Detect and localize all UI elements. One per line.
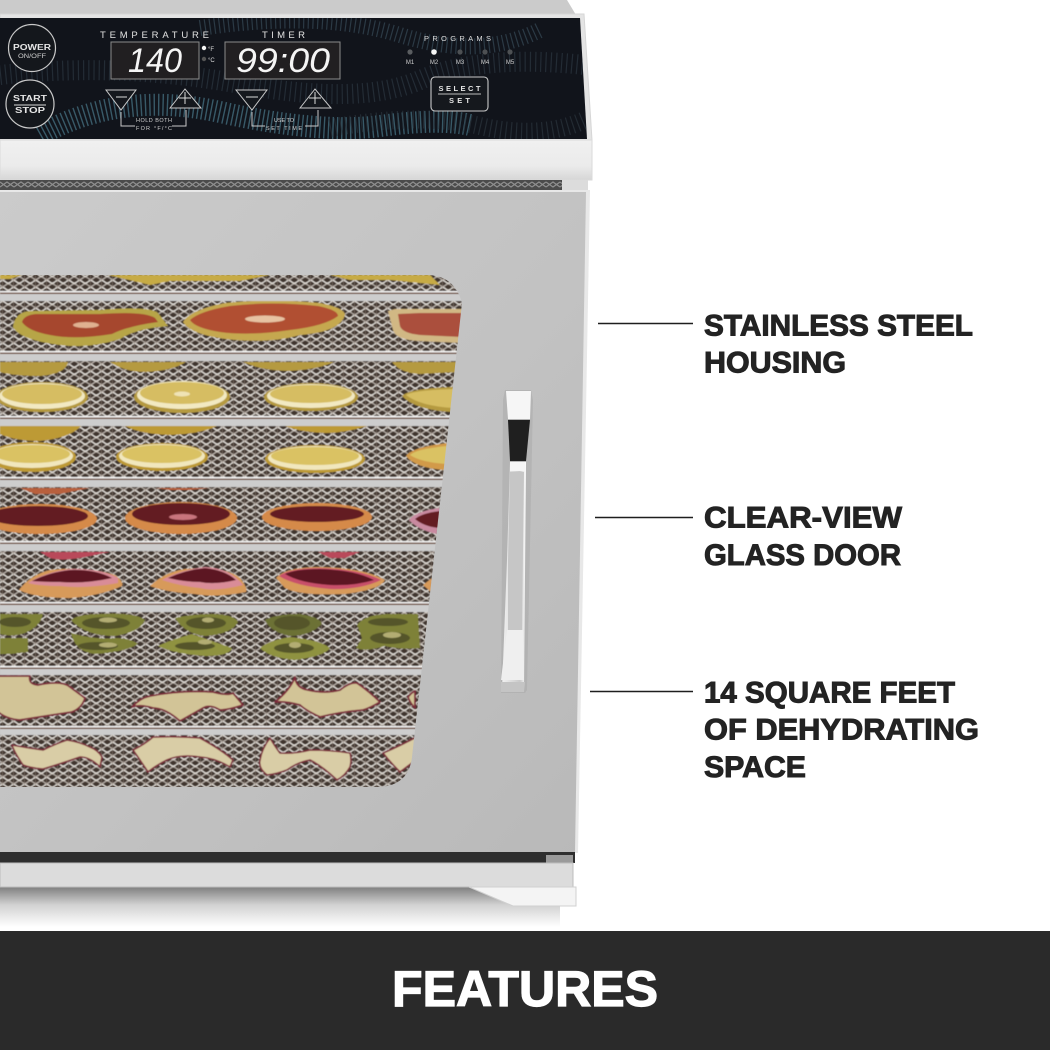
timer hint: USE TO <box>274 118 295 124</box>
window with trays <box>0 270 470 790</box>
temperature display: °F <box>208 47 214 53</box>
power button: ON/OFF <box>18 54 46 60</box>
tray rails <box>0 291 470 735</box>
select set button: SET <box>449 96 470 105</box>
callout: dehydrating space: OF DEHYDRATING <box>704 714 979 746</box>
temperature arrows <box>106 89 201 126</box>
callout: stainless steel housing <box>598 310 973 380</box>
timer set hint: SET TIME <box>266 126 302 132</box>
mesh <box>0 270 470 790</box>
panel wave pattern <box>0 20 585 135</box>
callout: clear-view glass door: CLEAR-VIEW <box>704 502 903 534</box>
temperature hint: HOLD BOTH <box>136 118 172 124</box>
base of appliance <box>0 852 576 906</box>
programs indicators: M1 <box>406 60 415 66</box>
lemon row one <box>0 362 458 413</box>
door edge <box>0 190 590 853</box>
lemon row two <box>0 426 448 473</box>
start stop button: START <box>13 94 47 103</box>
apple row two <box>12 735 420 780</box>
select set button: SELECT <box>438 84 481 93</box>
top tray fruit <box>0 275 440 285</box>
timer arrows <box>236 89 331 126</box>
temperature display: TEMPERATURE <box>100 30 209 41</box>
timer display: 99:00 <box>236 42 330 80</box>
door handle <box>501 390 533 693</box>
foot <box>469 887 576 906</box>
lid top <box>0 0 576 15</box>
vent right end <box>562 180 588 192</box>
callout: dehydrating space: 14 SQUARE FEET <box>704 676 955 710</box>
programs indicators: M4 <box>481 60 490 66</box>
power button: POWER <box>13 43 51 52</box>
title: FEATURES <box>392 961 658 1017</box>
programs indicators <box>406 34 515 66</box>
callout: stainless steel housing: STAINLESS STEEL <box>704 310 973 342</box>
lower control housing <box>0 140 592 180</box>
callout: clear-view glass door <box>595 502 903 572</box>
temperature display <box>100 30 215 80</box>
blood orange row two <box>19 552 432 598</box>
temperature display: 140 <box>128 42 182 80</box>
callout: dehydrating space: SPACE <box>704 751 806 784</box>
footer banner <box>0 931 1050 1050</box>
grapefruit row <box>13 300 462 346</box>
programs indicators: M3 <box>456 60 465 66</box>
apple row one <box>0 676 415 721</box>
temperature unit hint: FOR °F/°C <box>136 126 172 132</box>
timer display <box>225 30 340 80</box>
panel bezel <box>0 14 592 140</box>
programs indicators: M2 <box>430 60 439 66</box>
callout: clear-view glass door: GLASS DOOR <box>704 539 901 572</box>
vent mesh strip <box>0 180 586 192</box>
programs indicators: PROGRAMS <box>424 34 491 43</box>
dehydrator appliance <box>0 0 592 927</box>
floor shadow <box>0 887 560 927</box>
blood orange row one <box>0 488 440 534</box>
temperature display: °C <box>208 58 215 64</box>
control panel <box>0 18 587 139</box>
select set button <box>431 77 488 111</box>
door panel <box>0 192 586 852</box>
callout: dehydrating space <box>590 676 979 784</box>
power button <box>8 24 56 72</box>
start stop button: STOP <box>15 106 46 115</box>
timer display: TIMER <box>262 30 305 41</box>
callout: stainless steel housing: HOUSING <box>704 346 846 380</box>
start stop button <box>6 80 54 128</box>
programs indicators: M5 <box>506 60 515 66</box>
kiwi row <box>0 614 420 660</box>
